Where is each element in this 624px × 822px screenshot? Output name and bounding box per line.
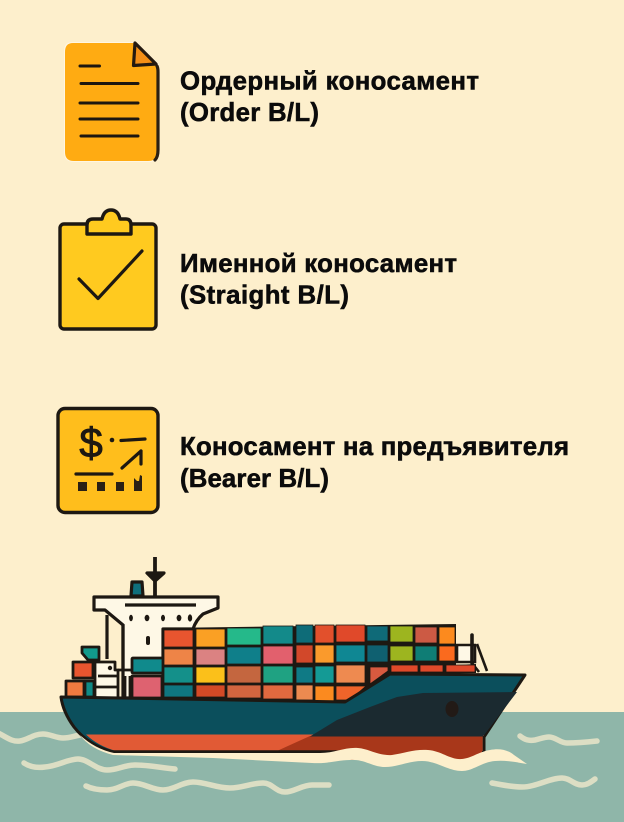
railing (457, 635, 487, 672)
container ship (61, 557, 527, 771)
bearer heading: Коносамент на предъявителя (180, 433, 569, 461)
container stack (162, 624, 476, 703)
icon: bearer finance card (58, 408, 158, 512)
sea (0, 712, 624, 822)
straight heading: (Straight B/L) (180, 282, 349, 310)
hull (61, 674, 525, 760)
bearer heading: (Bearer B/L) (180, 465, 329, 493)
icon: bearer finance card: $ (79, 419, 103, 466)
order heading: (Order B/L) (180, 99, 319, 127)
order heading (180, 68, 479, 127)
straight heading: Именной коносамент (180, 250, 457, 278)
stern cargo (66, 647, 163, 698)
order heading: Ордерный коносамент (180, 68, 479, 96)
icon: order document (64, 42, 159, 162)
ship superstructure (94, 557, 218, 698)
icon: clipboard with check mark (60, 210, 156, 329)
bow wave (80, 735, 527, 771)
bearer heading (180, 433, 569, 493)
straight heading (180, 250, 457, 310)
